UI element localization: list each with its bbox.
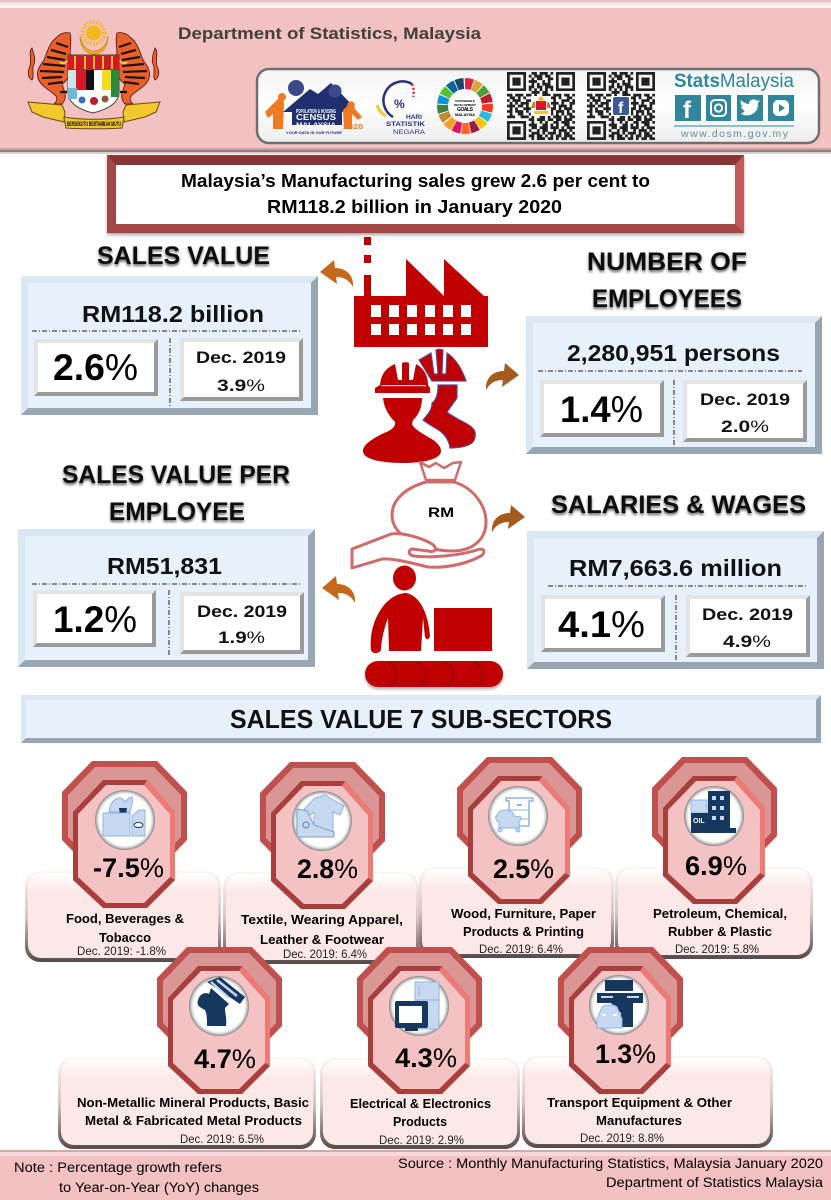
icon: oil tank and chemical plant [691,791,736,833]
source: Department of Statistics Malaysia [606,1175,824,1190]
note: Note : Percentage growth refers [14,1160,222,1175]
previous month box: 2.0 % [721,417,769,436]
icon: groceries [103,797,145,836]
value: RM51,831 [107,553,222,579]
icon: Hari Statistik Negara logo: STATISTIK [386,121,425,128]
icon: QR code with Facebook [587,72,655,140]
arrow: to salaries and wages [492,505,525,532]
sub-sector: textile, wearing apparel, leather and footwear: Dec. 2019: 6.4% [283,949,367,961]
previous month box: Dec. 2019 [702,605,793,624]
banner: sales value 7 sub-sectors: SALES VALUE 7 SUB-SECTORS [230,704,612,734]
sub-sector: wood, furniture, paper products and printing: Dec. 2019: 6.4% [479,944,563,956]
panel: number of employees [526,316,822,454]
icon: census 2020 logo [265,80,363,135]
icon: census 2020 logo: YOUR DATA IS OUR FUTURE [286,131,343,135]
icon: money bag on hand [352,462,486,568]
sub-sector: wood, furniture, paper products and printing: 2.5% [493,854,554,884]
heading: number of employees [587,248,747,313]
icon: shield [68,55,119,113]
previous month box [180,592,304,654]
sub-sector: transport equipment and other manufactures: Manufactures [596,1113,682,1128]
sub-sector: non-metallic mineral, basic metal and fabricated metal products: Non-Metallic Mineral Products, Basic [77,1095,309,1110]
sub-sector: food, beverages and tobacco: -7.5% [93,853,164,883]
growth box [33,590,156,647]
sub-sector: wood, furniture, paper products and printing: Wood, Furniture, Paper [451,906,596,921]
sub-sector: transport equipment and other manufactures: Dec. 2019: 8.8% [580,1133,664,1145]
growth box [541,595,665,652]
growth box [540,380,664,437]
sub-sector: transport equipment and other manufactures: Transport Equipment & Other [547,1095,732,1110]
icon: QR code with Facebook: f [618,100,624,117]
value: RM118.2 billion [82,301,264,327]
value: RM7,663.6 million [569,555,782,581]
sub-sector: electrical and electronics products: Dec. 2019: 2.9% [379,1135,464,1147]
sub-sector: non-metallic mineral, basic metal and fabricated metal products: 4.7% [194,1044,256,1074]
panel: logo strip [257,69,819,143]
sub-sector: food, beverages and tobacco: Food, Beverages & [66,911,184,926]
previous month box: 3.9 % [217,376,265,395]
source [398,1156,824,1190]
growth box [34,339,158,396]
sub-sector: transport equipment and other manufactures: 1.3% [595,1039,656,1069]
sub-sector: wood, furniture, paper products and printing: Products & Printing [463,924,584,939]
previous month box: Dec. 2019 [197,602,287,621]
sub-sector: wood, furniture, paper products and printing [419,757,614,958]
icon: social media buttons: f [683,97,692,124]
sub-sector: petroleum, chemical, rubber and plastic: Petroleum, Chemical, [653,906,787,921]
footer band [0,1150,831,1200]
sub-sector: food, beverages and tobacco [25,761,221,962]
sub-sector: electrical and electronics products: 4.3% [395,1043,457,1073]
panel: salaries and wages [527,531,824,669]
icon: SDG wheel [433,74,497,138]
icon: Hari Statistik Negara logo: % [394,97,405,111]
headline text: RM118.2 billion in January 2020 [267,197,562,217]
icon: fridge and monitor [395,982,439,1031]
sub-sector: petroleum, chemical, rubber and plastic: Dec. 2019: 5.8% [675,944,759,956]
heading: salaries and wages: SALARIES & WAGES [551,491,806,519]
panel: sales value per employee [18,529,315,667]
icon: worker at conveyor [365,566,503,687]
icon: Hari Statistik Negara logo [377,81,426,136]
panel: headline box [107,155,744,233]
sub-sector: transport equipment and other manufactures [522,947,773,1148]
previous month box [683,380,807,442]
header band [0,0,831,154]
icon: SDG wheel: MALAYSIA [455,112,475,117]
heading: sales value: SALES VALUE [97,242,270,270]
icon: QR code with crest [507,72,575,140]
heading: number of employees: EMPLOYEES [592,285,742,313]
previous month box [686,595,810,657]
icon: census 2020 logo: 2020 [343,124,363,131]
sub-sector: petroleum, chemical, rubber and plastic: 6.9% [685,851,747,881]
sub-sector: electrical and electronics products [320,947,520,1149]
icon: Hari Statistik Negara logo: HARI [406,114,422,121]
source: Source : Monthly Manufacturing Statistics, Malaysia January 2020 [398,1156,823,1171]
icon: motto scroll: BERSEKUTU BERTAMBAH MUTU [67,121,121,128]
heading: sales value per employee [62,461,290,526]
sub-sector: petroleum, chemical, rubber and plastic: Rubber & Plastic [668,924,772,939]
sub-sector: textile, wearing apparel, leather and footwear: Leather & Footwear [260,932,384,947]
icon: workers with helmets [363,349,475,463]
growth box: 2.6% [53,347,138,388]
icon: SDG wheel: DEVELOPMENT [454,103,476,107]
icon: furniture [496,798,533,832]
sub-sector: petroleum, chemical, rubber and plastic [615,757,813,959]
value: 2,280,951 persons [567,340,780,366]
heading: number of employees: NUMBER OF [587,248,747,276]
icon: SDG wheel: SUSTAINABLE [455,99,475,103]
sub-sector: food, beverages and tobacco: Dec. 2019: -1.8% [77,946,166,958]
growth box: 1.2% [53,599,137,640]
icon: census 2020 logo: POPULATION & HOUSING [296,109,336,115]
front worker [363,362,441,463]
icon: crest star and crescent [80,22,108,54]
icon: Hari Statistik Negara logo: NEGARA [393,129,426,136]
heading: sales value per employee: SALES VALUE PER [62,461,290,489]
previous month box [180,338,303,401]
icon: truck and car [597,980,643,1028]
sub-sector: textile, wearing apparel, leather and footwear: 2.8% [297,854,358,884]
icon: oil tank and chemical plant: OIL [693,818,705,825]
icon: Malaysia coat of arms [28,22,160,129]
icon: census 2020 logo: MALAYSIA [296,122,336,129]
previous month box: Dec. 2019 [700,390,790,409]
sub-sector: food, beverages and tobacco: Tobacco [99,930,151,945]
StatsMalaysia brand [674,71,794,140]
sub-sector: electrical and electronics products: Electrical & Electronics [350,1096,491,1111]
headline text [181,171,650,217]
icon: SDG wheel: GOALS [457,107,474,113]
growth box: 1.4% [560,389,643,430]
banner: sales value 7 sub-sectors [21,695,821,743]
sub-sector: non-metallic mineral, basic metal and fabricated metal products [58,947,316,1149]
icon: tigers [28,33,159,104]
note [14,1160,259,1195]
previous month box: 1.9 % [218,628,265,647]
icon: shirt and shoe [297,795,344,837]
headline text: Malaysia’s Manufacturing sales grew 2.6 per cent to [181,171,650,191]
back worker [419,349,475,448]
sub-sector: textile, wearing apparel, leather and footwear: Textile, Wearing Apparel, [241,912,403,927]
note: to Year-on-Year (YoY) changes [59,1180,259,1195]
header title: Department of Statistics, Malaysia [178,24,482,43]
sub-sector: non-metallic mineral, basic metal and fabricated metal products: Metal & Fabricated Metal Products [85,1113,302,1128]
sub-sector: electrical and electronics products: Products [393,1114,447,1129]
arrow: to sales value per employee [322,576,355,603]
StatsMalaysia brand: www.dosm.gov.my [680,128,789,140]
icon: factory [354,237,488,347]
icon: census 2020 logo: CENSUS [296,113,337,122]
icon: money bag on hand: RM [428,504,454,520]
growth box: 4.1% [558,604,645,645]
icon: metal bars and rock [198,977,245,1026]
sub-sector: non-metallic mineral, basic metal and fabricated metal products: Dec. 2019: 6.5% [180,1134,264,1146]
arrow: to number of employees [486,363,519,390]
arrow: to sales value [320,260,353,287]
previous month box: 4.9 % [723,632,771,651]
sub-sector: textile, wearing apparel, leather and footwear [223,762,419,964]
StatsMalaysia brand: StatsMalaysia [674,71,794,92]
previous month box: Dec. 2019 [196,348,286,367]
heading: sales value per employee: EMPLOYEE [109,498,245,526]
panel: sales value [21,276,318,415]
